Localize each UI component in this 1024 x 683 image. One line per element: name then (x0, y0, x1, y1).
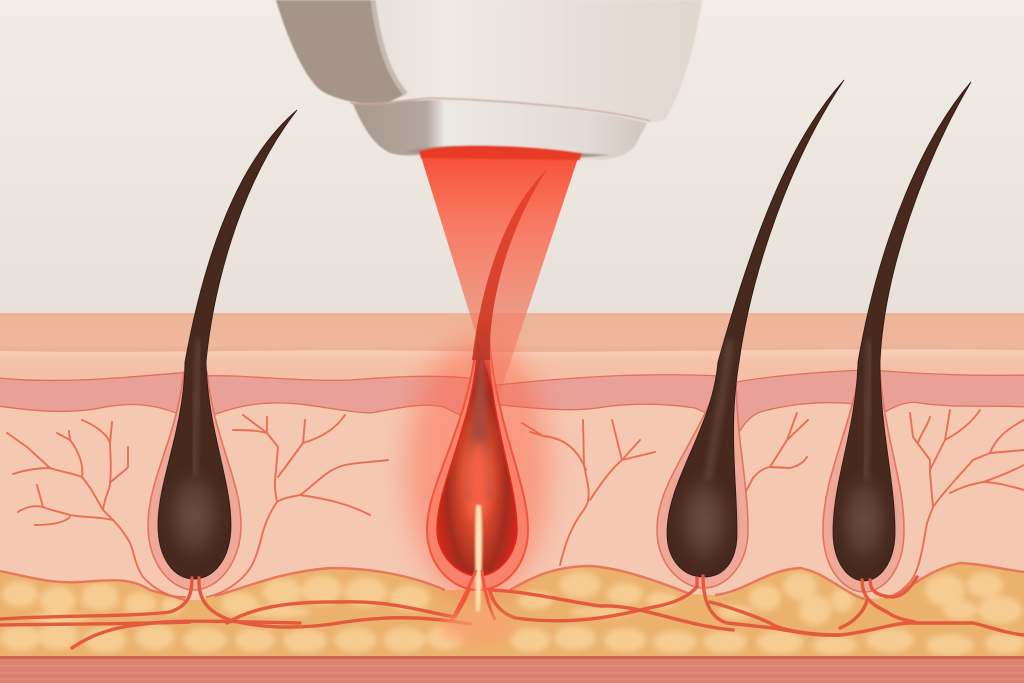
vessel tree 2 (207, 415, 388, 597)
hair follicle 5 (833, 82, 971, 581)
central hair shaft in beam (472, 168, 548, 360)
left dark facet (276, 0, 406, 104)
dermal blood vessel branches (7, 410, 1024, 597)
hair follicle 1 (158, 110, 297, 579)
hair follicle 4 (667, 80, 844, 577)
muscle layer (0, 656, 1024, 683)
subcutaneous fat layer (0, 563, 1024, 657)
skin top surface (0, 313, 1024, 355)
vessel tree 5 (887, 410, 1024, 597)
follicle sheaths (148, 372, 904, 592)
upper body (276, 0, 702, 122)
heat streak (475, 505, 482, 612)
pink skin band (0, 370, 1024, 440)
vessel tree 3 (522, 420, 655, 565)
red aperture (405, 145, 610, 159)
dermis base (0, 395, 1024, 605)
red glow around target follicle (406, 340, 550, 600)
background wall (0, 0, 1024, 316)
laser beam (419, 150, 580, 402)
laser handpiece (276, 0, 702, 160)
vessel tree 4 (745, 413, 808, 493)
vessel tree 1 (7, 420, 185, 597)
target follicle, laser-heated (427, 325, 528, 644)
fat cells (0, 572, 1024, 656)
lower nozzle ring (353, 100, 647, 160)
epidermis front face (0, 349, 1024, 400)
subdermal blood vessels (0, 576, 1024, 648)
